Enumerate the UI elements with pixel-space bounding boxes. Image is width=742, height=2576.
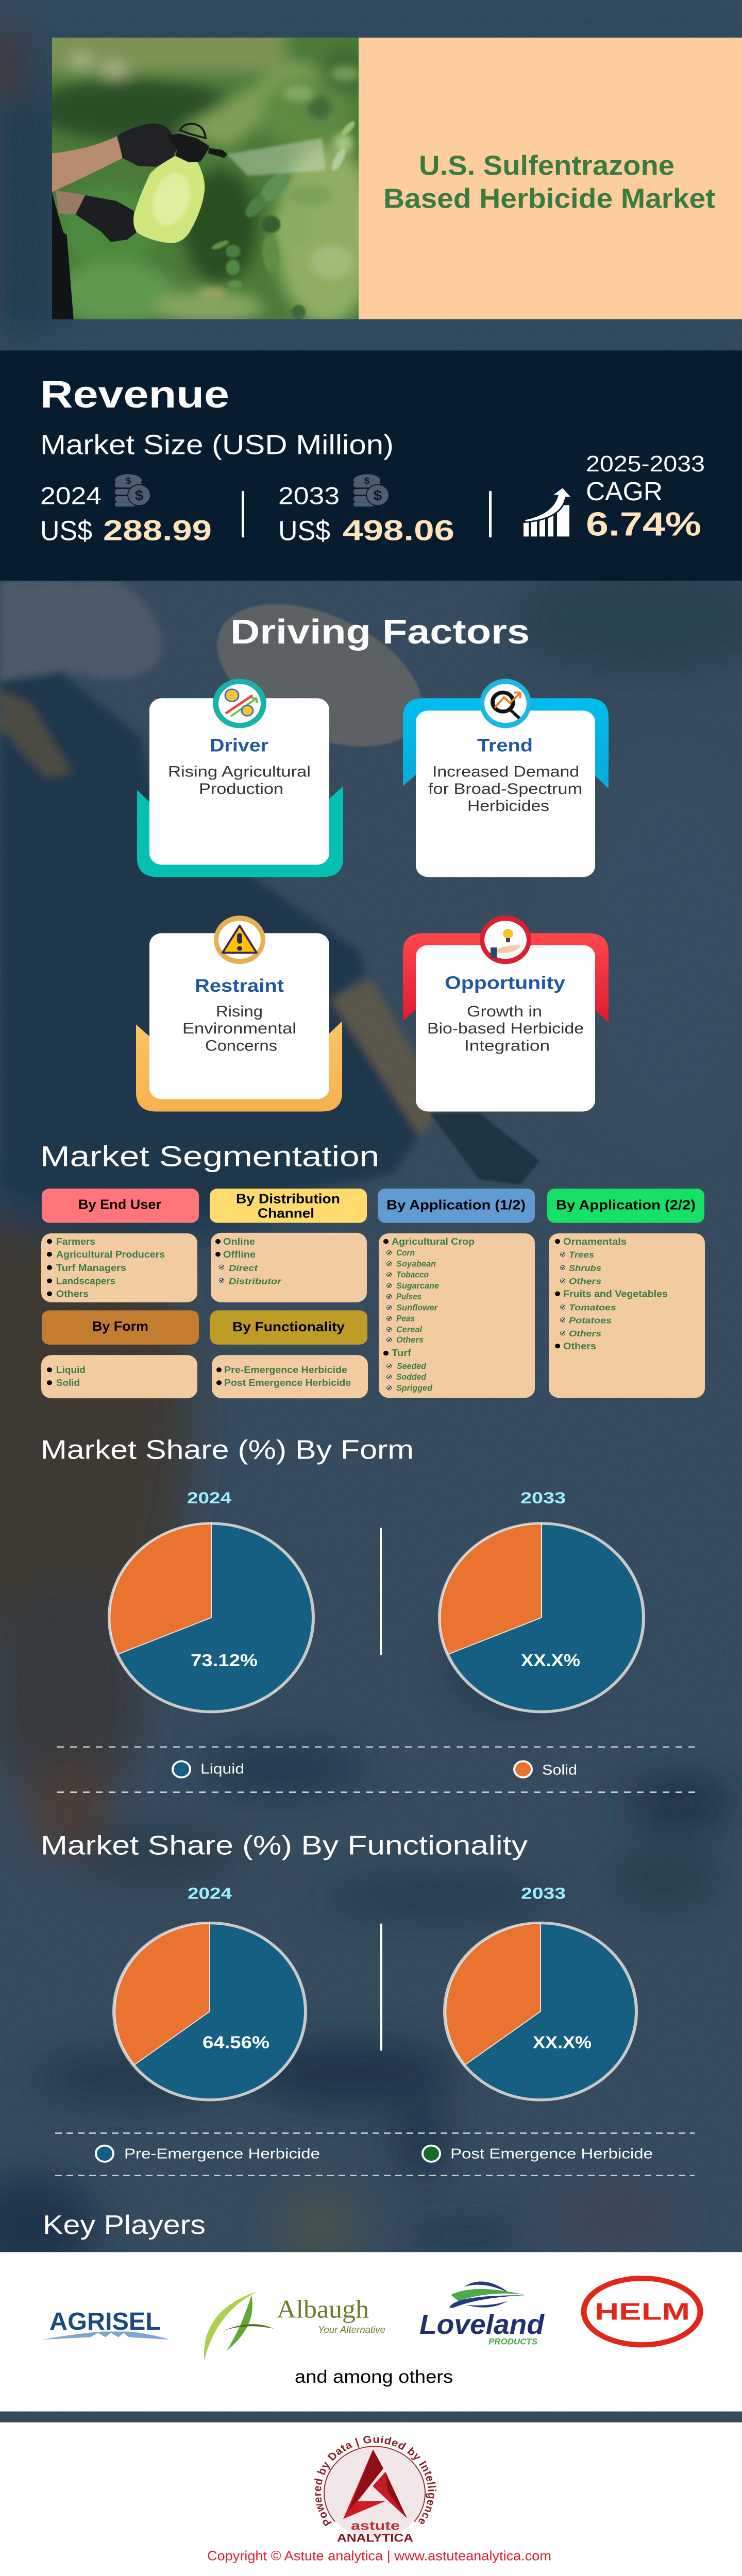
restraint text — [182, 975, 296, 1054]
logo: albaugh: Albaugh — [277, 2296, 369, 2324]
panel: by functionality: Post Emergence Herbicide — [224, 1378, 351, 1388]
panel: by end user: Turf Managers — [56, 1263, 126, 1274]
trend text: Increased Demand — [432, 763, 579, 780]
chart: functionality 2033 — [445, 1884, 636, 2100]
panel: by functionality: Pre-Emergence Herbicide — [224, 1365, 347, 1376]
icon: coins: $ — [374, 488, 382, 504]
panel: by application 1: Tobacco — [396, 1269, 429, 1280]
driver text: Rising Agricultural — [168, 763, 311, 780]
heading: key players: Key Players — [43, 2210, 206, 2240]
chart: form 2033: 2033 — [520, 1488, 566, 1507]
panel: by form: Liquid — [56, 1365, 86, 1376]
panel: by application 1: Corn — [396, 1248, 415, 1258]
driver text: Driver — [210, 735, 268, 755]
chart: functionality 2033: XX.X% — [533, 2033, 592, 2052]
opportunity text — [427, 973, 584, 1054]
icon: growth arrow — [524, 487, 572, 536]
icon: coins: $ — [364, 476, 369, 486]
panel: by functionality — [210, 1310, 368, 1398]
heading: market share by form: Market Share (%) By Form — [41, 1435, 414, 1465]
panel: by end user: Farmers — [56, 1237, 95, 1247]
panel: by application 2: Shrubs — [569, 1263, 601, 1273]
title panel: U.S. Sulfentrazone — [419, 150, 674, 181]
icon: coins: $ — [126, 476, 131, 486]
panel: by application 1 — [378, 1189, 535, 1398]
spray mist — [227, 138, 326, 176]
panel: by application 1: Sunflower — [396, 1302, 438, 1312]
chart: form 2033 — [440, 1488, 644, 1712]
chart: functionality 2024: 64.56% — [203, 2033, 269, 2052]
icon: coins — [353, 474, 389, 506]
panel: by application 1: Pulses — [396, 1292, 421, 1301]
panel: key players — [0, 2252, 742, 2412]
2033 value: 2033 — [278, 483, 340, 510]
2033 value: US$ — [278, 515, 330, 546]
sprayer head — [165, 133, 209, 162]
logo: helm: HELM — [595, 2298, 690, 2325]
panel: by application 1: Sugarcane — [396, 1281, 439, 1291]
2024 value: US$ — [40, 515, 92, 546]
chart: form 2033: XX.X% — [521, 1651, 580, 1670]
panel: by form: By Form — [92, 1319, 148, 1334]
panel: by end user: Others — [56, 1289, 89, 1299]
trend text — [428, 735, 582, 815]
panel: by end user: Agricultural Producers — [56, 1250, 165, 1260]
panel: by application 1: Cereal — [396, 1325, 423, 1334]
CAGR: 2025-2033 — [586, 451, 705, 476]
panel: by distribution channel: Channel — [258, 1206, 314, 1221]
opportunity text: Growth in — [467, 1003, 542, 1020]
logo: helm — [584, 2278, 700, 2345]
heading: market share by functionality: Market Share (%) By Functionality — [41, 1831, 528, 1860]
panel: by application 2: Others — [569, 1276, 601, 1286]
panel: by end user: By End User — [78, 1197, 162, 1212]
photo backdrop blur — [32, 20, 377, 325]
trend text: for Broad-Spectrum — [428, 780, 582, 798]
icon: driver — [213, 679, 266, 728]
panel: by end user: Landscapers — [56, 1276, 115, 1286]
opportunity text: Bio-based Herbicide — [427, 1020, 584, 1037]
panel: by distribution channel — [210, 1189, 367, 1302]
heading: market segmentation: Market Segmentation — [40, 1141, 379, 1173]
panel: by distribution channel: Online — [223, 1237, 255, 1247]
title panel: Based Herbicide Market — [383, 183, 715, 214]
panel: by application 2 — [547, 1189, 705, 1398]
panel: by application 2: Others — [563, 1342, 596, 1352]
restraint text: Environmental — [182, 1020, 296, 1037]
text: among others: and among others — [295, 2367, 453, 2387]
panel: by application 1: Agricultural Crop — [392, 1237, 475, 1247]
2033 value: 498.06 — [343, 515, 454, 547]
panel: by application 1: Seeded — [397, 1361, 426, 1371]
panel: by distribution channel: Offline — [223, 1250, 256, 1260]
logo: loveland: Loveland — [419, 2309, 545, 2340]
trend text: Herbicides — [467, 797, 549, 815]
panel: by application 2: Fruits and Vegetables — [563, 1289, 668, 1299]
panel: by application 2: Others — [569, 1329, 601, 1338]
revenue band — [0, 350, 742, 581]
chart: form 2024: 73.12% — [191, 1651, 258, 1670]
panel: by application 1: Turf — [392, 1348, 412, 1359]
market size label: Market Size (USD Million) — [40, 429, 394, 460]
legend: form — [173, 1761, 577, 1778]
footer panel — [0, 2422, 742, 2576]
chart: functionality 2024 — [114, 1884, 306, 2100]
panel: by application 2: By Application (2/2) — [556, 1198, 696, 1212]
panel: by functionality: By Functionality — [232, 1319, 345, 1334]
icon: opportunity — [480, 916, 531, 964]
logo: albaugh — [204, 2292, 385, 2361]
restraint text: Restraint — [195, 975, 284, 996]
revenue heading: Revenue — [40, 374, 229, 416]
chart: functionality 2024: 2024 — [188, 1884, 232, 1902]
2024 value: 288.99 — [103, 515, 212, 547]
logo: loveland: PRODUCTS — [488, 2336, 537, 2346]
panel: opportunity — [403, 916, 609, 1111]
panel: by form: Solid — [56, 1378, 80, 1388]
logo: astute analytica: ANALYTICA — [337, 2531, 413, 2544]
2024 value: 2024 — [40, 483, 102, 510]
CAGR: 6.74% — [586, 506, 701, 543]
out-of-focus foliage — [199, 65, 360, 299]
driver text: Production — [199, 780, 283, 798]
driver text — [168, 735, 311, 798]
panel: by form — [41, 1310, 199, 1398]
panel: by application 2: Tomatoes — [569, 1302, 616, 1312]
opportunity text: Opportunity — [445, 973, 566, 993]
legend: functionality: Pre-Emergence Herbicide — [124, 2146, 320, 2162]
panel: by end user — [41, 1189, 199, 1302]
bottle — [133, 156, 205, 243]
header photo: sprayer on foliage — [52, 37, 359, 319]
legend: functionality — [96, 2146, 653, 2162]
logo: astute analytica: astute — [351, 2519, 400, 2533]
2024 value — [40, 483, 212, 547]
CAGR: CAGR — [586, 477, 663, 506]
panel: by distribution channel: Direct — [229, 1263, 258, 1273]
logo: agrisel: AGRISEL — [49, 2308, 161, 2335]
panel: by application 1: Others — [396, 1335, 424, 1345]
logo: loveland — [419, 2281, 545, 2346]
trend text: Trend — [477, 735, 533, 755]
icon: restraint — [214, 916, 265, 964]
logo: albaugh: Your Alternative — [318, 2325, 385, 2335]
gloves — [117, 123, 177, 167]
panel: by application 2: Trees — [569, 1250, 594, 1260]
panel: by application 1: By Application (1/2) — [386, 1198, 526, 1212]
panel: by application 1: Sodded — [396, 1372, 426, 1382]
in-focus leaves — [210, 120, 357, 320]
panel: restraint — [136, 916, 342, 1111]
chart: form 2024 — [109, 1488, 313, 1712]
panel: by distribution channel: By Distribution — [236, 1192, 340, 1206]
restraint text: Concerns — [205, 1037, 277, 1054]
panel: by application 2: Ornamentals — [563, 1237, 627, 1247]
heading: driving factors: Driving Factors — [230, 613, 530, 651]
panel: driver — [137, 679, 343, 877]
2033 value — [278, 483, 454, 547]
legend: form: Liquid — [200, 1761, 244, 1777]
panel: by application 1: Sprigged — [396, 1383, 432, 1393]
icon: trend — [480, 679, 531, 728]
panel: by distribution channel: Distributor — [229, 1276, 282, 1286]
logo: astute analytica: Powered by Data | Guided by Intelligence — [314, 2436, 436, 2527]
panel: by application 1: Peas — [396, 1313, 415, 1323]
panel: trend — [403, 679, 609, 877]
chart: form 2024: 2024 — [187, 1488, 232, 1507]
apron — [52, 192, 74, 319]
CAGR — [586, 451, 705, 543]
chart: functionality 2033: 2033 — [521, 1884, 566, 1902]
panel: by application 2: Potatoes — [569, 1315, 612, 1325]
restraint text: Rising — [216, 1003, 263, 1020]
arms — [52, 137, 123, 192]
copyright: Copyright © Astute analytica | www.astuteanalytica.com — [207, 2549, 551, 2563]
legend: functionality: Post Emergence Herbicide — [450, 2146, 653, 2162]
opportunity text: Integration — [464, 1037, 550, 1054]
icon: coins — [115, 474, 150, 506]
panel: by application 1: Soyabean — [396, 1259, 436, 1268]
icon: coins: $ — [135, 488, 143, 504]
legend: form: Solid — [542, 1762, 577, 1778]
title panel — [359, 38, 742, 319]
